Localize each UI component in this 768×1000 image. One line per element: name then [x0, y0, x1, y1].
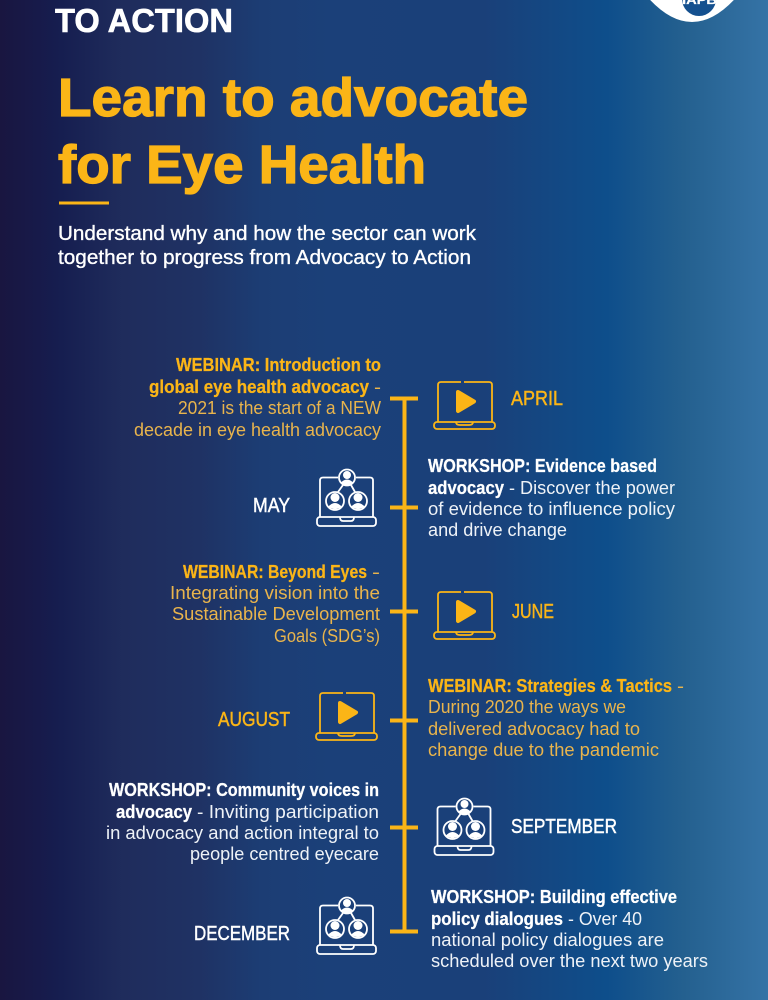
august: webinar text: delivered advocacy had to [428, 719, 640, 739]
month: may: MAY [253, 495, 290, 517]
icon: august play laptop [316, 693, 377, 740]
may: workshop text: and drive change [428, 520, 567, 540]
subtitle [58, 222, 477, 269]
august: webinar text: WEBINAR: Strategies & Tactics [428, 676, 672, 696]
december: workshop text: WORKSHOP: Building effective [431, 887, 677, 907]
subtitle: together to progress from Advocacy to Action [58, 246, 471, 269]
may: workshop text: - Discover the power [509, 478, 675, 498]
december: workshop text [431, 887, 708, 971]
title [58, 68, 528, 195]
august: webinar text [428, 676, 684, 760]
may: workshop text: advocacy [428, 478, 504, 498]
august: webinar text: change due to the pandemic [428, 740, 659, 760]
august: webinar text: - [677, 676, 684, 696]
september: workshop text: advocacy [116, 802, 192, 822]
heading: to action: TO ACTION [55, 2, 233, 39]
september: workshop text: people centred eyecare [190, 844, 379, 864]
title underline [59, 202, 109, 204]
june: webinar text [170, 562, 380, 646]
september: workshop text: WORKSHOP: Community voices in [109, 780, 379, 800]
logo: IAPB eye [640, 0, 744, 22]
may: workshop text: of evidence to influence policy [428, 499, 675, 519]
month: april: APRIL [511, 388, 563, 410]
august: webinar text: During 2020 the ways we [428, 697, 626, 717]
april: webinar text: WEBINAR: Introduction to [176, 355, 381, 375]
month: december: DECEMBER [194, 923, 290, 945]
april: webinar text: - [374, 377, 381, 397]
icon: may people laptop [317, 470, 376, 526]
december: workshop text: scheduled over the next two years [431, 951, 708, 971]
timeline [390, 396, 418, 934]
september: workshop text: in advocacy and action integral to [106, 823, 379, 843]
month: june: JUNE [512, 601, 554, 623]
june: webinar text: Sustainable Development [172, 604, 380, 624]
icon: december people laptop [317, 898, 376, 954]
december: workshop text: national policy dialogues are [431, 930, 664, 950]
icon: april play laptop [434, 382, 495, 429]
september: workshop text: - Inviting participation [197, 802, 379, 822]
april: webinar text: 2021 is the start of a NEW [178, 398, 381, 418]
title: Learn to advocate [58, 68, 528, 128]
may: workshop text [428, 456, 675, 540]
april: webinar text: decade in eye health advocacy [134, 420, 381, 440]
december: workshop text: - Over 40 [568, 909, 642, 929]
month: august: AUGUST [218, 709, 290, 731]
june: webinar text: Goals (SDG’s) [274, 626, 380, 646]
april: webinar text [134, 355, 381, 440]
title: for Eye Health [58, 135, 426, 195]
subtitle: Understand why and how the sector can work [58, 222, 477, 245]
icon: june play laptop [434, 592, 495, 639]
june: webinar text: WEBINAR: Beyond Eyes [183, 562, 367, 582]
december: workshop text: policy dialogues [431, 909, 563, 929]
june: webinar text: Integrating vision into the [170, 583, 380, 603]
may: workshop text: WORKSHOP: Evidence based [428, 456, 657, 476]
september: workshop text [106, 780, 379, 864]
april: webinar text: global eye health advocacy [149, 377, 369, 397]
june: webinar text: - [372, 562, 380, 582]
month: september: SEPTEMBER [511, 816, 617, 838]
icon: september people laptop [434, 798, 494, 855]
